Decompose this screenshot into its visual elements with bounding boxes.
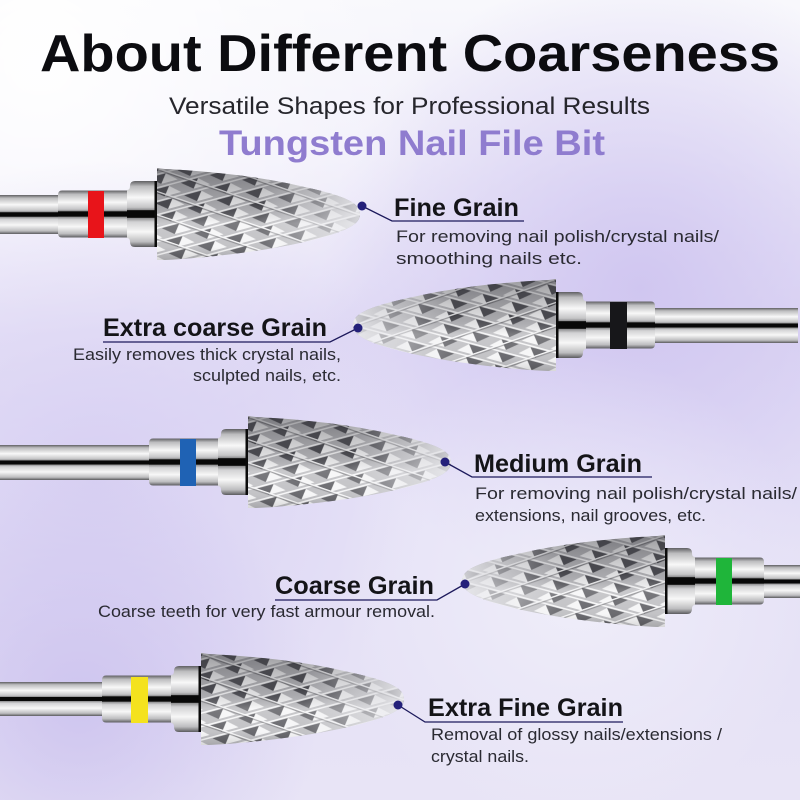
label: coarse grain: Coarse Grain (275, 572, 434, 600)
label: medium grain: extensions, nail grooves, etc. (475, 506, 706, 525)
label: medium grain: For removing nail polish/crystal nails/ (475, 484, 797, 503)
label: medium grain: Medium Grain (474, 450, 642, 478)
label: fine grain: smoothing nails etc. (396, 249, 582, 268)
label: extra coarse grain (73, 314, 362, 385)
label: extra fine grain: Removal of glossy nails/extensions / (431, 725, 722, 744)
label: extra fine grain (394, 694, 722, 766)
label: extra fine grain: crystal nails. (431, 747, 529, 766)
drill bit: extra coarse grain, black band (351, 278, 798, 372)
label: coarse grain (98, 572, 470, 621)
label: fine grain (358, 194, 719, 268)
label: extra fine grain: Extra Fine Grain (428, 694, 623, 722)
label: medium grain (440, 450, 797, 525)
subtitle: Versatile Shapes for Professional Results (169, 93, 650, 120)
label: coarse grain: Coarse teeth for very fast armour removal. (98, 602, 435, 621)
title: About Different Coarseness (40, 25, 780, 83)
drill bit: fine grain, red band (0, 167, 362, 261)
drill bit: coarse grain, green band (460, 534, 800, 628)
product heading: Tungsten Nail File Bit (219, 124, 605, 163)
drill bit: medium grain, blue band (0, 415, 453, 509)
label: fine grain: For removing nail polish/crystal nails/ (396, 227, 719, 246)
label: extra coarse grain: sculpted nails, etc. (193, 366, 341, 385)
label: fine grain: Fine Grain (394, 194, 519, 222)
label: extra coarse grain: Extra coarse Grain (103, 314, 327, 342)
label: extra coarse grain: Easily removes thick crystal nails, (73, 345, 341, 364)
drill bit: extra fine grain, yellow band (0, 652, 406, 746)
